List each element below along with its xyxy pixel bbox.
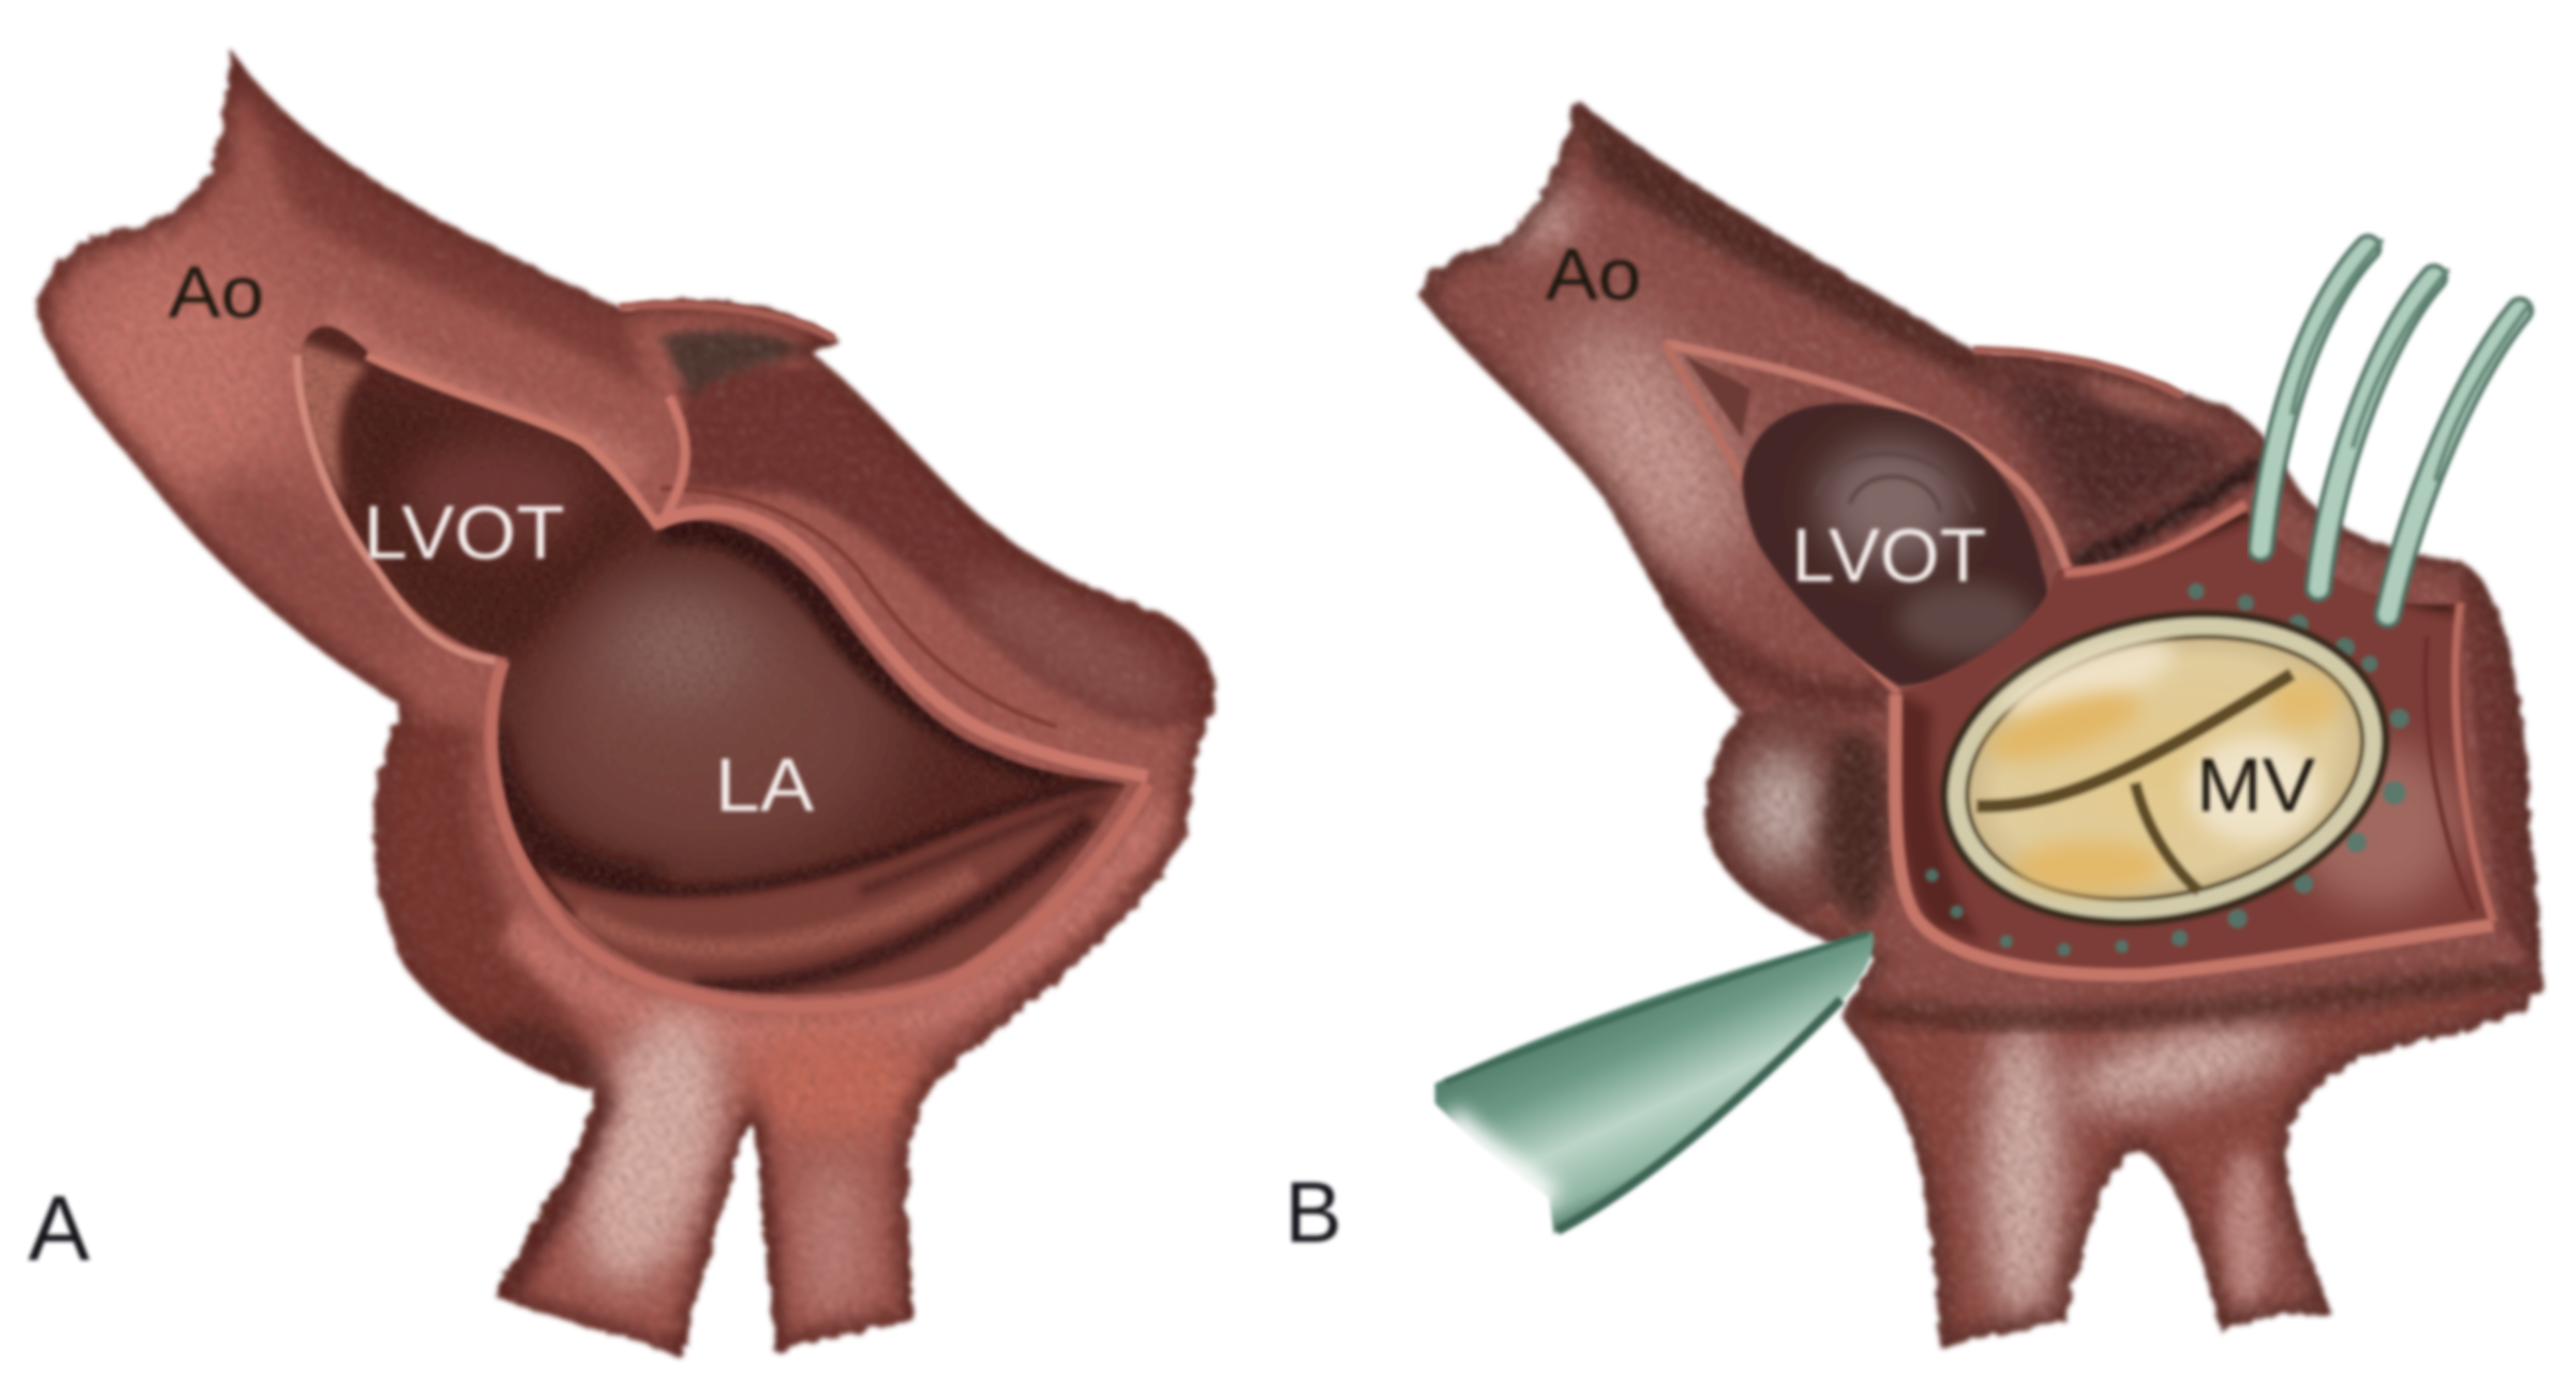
tissue: bulging appendage <box>1709 702 1874 917</box>
label: Ao: Ao <box>1546 234 1641 315</box>
tissue: right wall <box>2461 570 2543 974</box>
label: LVOT: LVOT <box>364 490 564 575</box>
edge shading <box>1420 99 2543 1347</box>
cavity: LVOT <box>1685 355 2048 685</box>
tissue: aorta and atrial wall silhouette <box>32 47 1221 1361</box>
rims around the cavity <box>297 305 1147 1007</box>
label: LA: LA <box>715 744 814 828</box>
cavity: LVOT and left atrium <box>293 314 1139 1024</box>
tissue: pulmonary veins <box>555 996 749 1300</box>
cavity: opened atrium <box>1898 479 2490 971</box>
label: LVOT: LVOT <box>1791 514 1986 598</box>
edge shading <box>37 50 1215 1358</box>
mitral valve prosthesis ring and leaflets <box>1909 567 2421 969</box>
tissue: aorta and atrial wall silhouette <box>1403 66 2576 1388</box>
panel B: exposed mitral valve <box>1284 66 2576 1388</box>
panel letter B: B <box>1284 1165 1342 1261</box>
retractor stay sutures <box>2261 241 2530 614</box>
aortic root interior rim <box>1665 343 2183 694</box>
spatula retractor <box>1435 932 1874 1234</box>
tissue: lower atrial wall <box>377 707 598 1063</box>
rims around the atrial opening <box>1895 504 2494 975</box>
label: Ao: Ao <box>169 252 264 333</box>
label: MV: MV <box>2196 744 2315 828</box>
panel letter A: A <box>28 1177 90 1280</box>
tissue: pulmonary veins <box>1850 974 2543 1354</box>
panel A: normal anatomy <box>26 47 1221 1361</box>
sutures around the annulus <box>1925 583 2409 956</box>
tissue: right atrial bulge <box>681 365 1215 728</box>
lower lip of the atrium <box>536 781 1131 1002</box>
